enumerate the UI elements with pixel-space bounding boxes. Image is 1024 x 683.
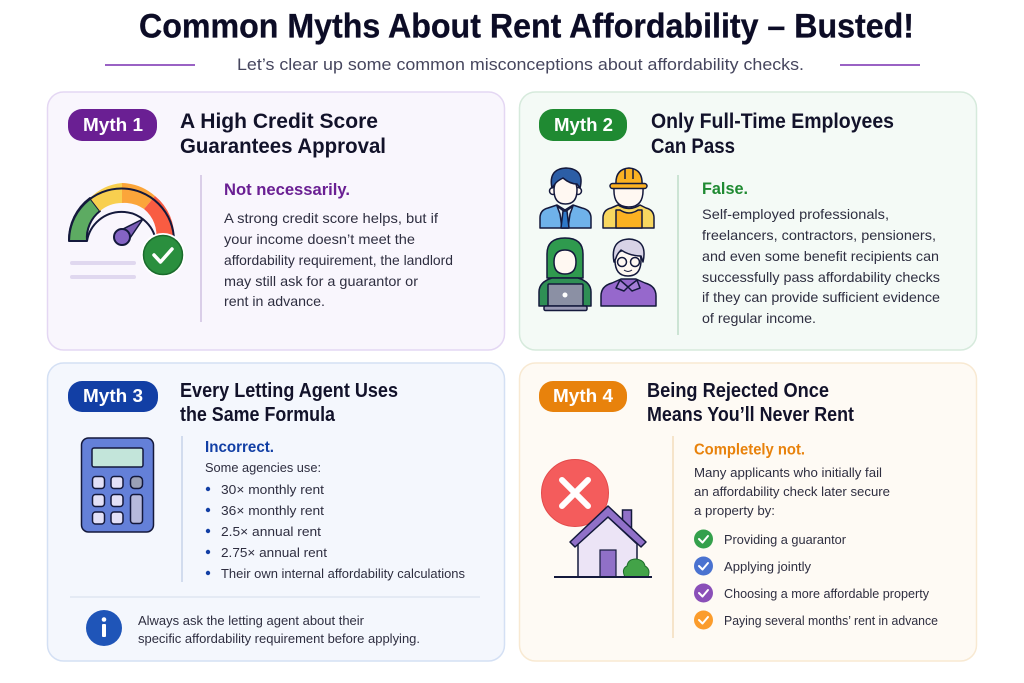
myth 1 body text: your income doesn’t meet the <box>224 231 415 247</box>
myth 4 heading <box>647 380 854 426</box>
myth 2 heading <box>651 109 894 158</box>
myth 4 body text: a property by: <box>694 503 775 518</box>
myth 1 heading <box>180 109 386 158</box>
subtitle: Let’s clear up some common misconceptions about affordability checks. <box>237 55 804 74</box>
worker: construction <box>603 168 654 228</box>
myth 3 heading <box>180 380 398 426</box>
myth 4 body text <box>694 465 890 518</box>
myth 2 body text: of regular income. <box>702 310 816 326</box>
worker: freelancer with laptop <box>539 238 591 310</box>
myth 4 body text: an affordability check later secure <box>694 484 890 499</box>
myth 1 badge: Myth 1 <box>83 115 143 135</box>
check: guarantor <box>694 530 846 548</box>
panel: myth 1 <box>48 92 504 350</box>
check: affordable property <box>694 584 930 602</box>
check: jointly <box>694 556 812 576</box>
myth 2 body text: if they can provide sufficient evidence <box>702 289 940 305</box>
myth 1 body text <box>224 210 453 309</box>
icon: credit score gauge <box>69 183 185 279</box>
myth 3 heading: the Same Formula <box>180 404 336 426</box>
worker: office employee <box>540 168 591 228</box>
myth 2 body text <box>702 206 940 326</box>
myth 4 verdict: Completely not. <box>694 442 805 458</box>
myth 3 badge: Myth 3 <box>83 386 143 406</box>
panel: myth 3 <box>48 363 504 661</box>
myth 3 verdict: Incorrect. <box>205 439 274 456</box>
myth 3 formula list <box>205 460 465 581</box>
myth 2 heading: Can Pass <box>651 134 735 158</box>
check: guarantor: Providing a guarantor <box>724 533 846 547</box>
myth 1 body text: may still ask for a guarantor or <box>224 273 418 289</box>
myth 1 body text: A strong credit score helps, but if <box>224 210 438 226</box>
myth 3 formula list: 2.75× annual rent <box>221 545 327 560</box>
myth 1 verdict: Not necessarily. <box>224 180 350 199</box>
myth 2 body text: Self-employed professionals, <box>702 206 889 222</box>
tip text: Always ask the letting agent about their <box>138 613 365 628</box>
check: rent in advance: Paying several months’ rent in advance <box>724 614 938 628</box>
worker: pensioner <box>601 239 656 306</box>
myth 2 badge: Myth 2 <box>554 115 613 135</box>
myth 4 badge <box>539 381 627 412</box>
myth 1 badge <box>68 109 157 141</box>
check: affordable property: Choosing a more affordable property <box>724 587 930 601</box>
tip text <box>138 613 420 646</box>
myth 2 badge <box>539 109 627 141</box>
icon: rejected house <box>542 460 652 577</box>
title: Common Myths About Rent Affordability – Busted! <box>139 8 914 46</box>
checklist <box>694 530 938 630</box>
myth 3 formula list: Their own internal affordability calculations <box>221 566 465 581</box>
myth 2 verdict: False. <box>702 179 748 198</box>
icon: calculator <box>82 438 154 532</box>
myth 3 formula list: 2.5× annual rent <box>221 524 321 539</box>
myth 1 heading: Guarantees Approval <box>180 134 386 158</box>
myth 2 heading: Only Full-Time Employees <box>651 109 894 133</box>
myth 4 badge: Myth 4 <box>553 386 613 406</box>
myth 3 badge <box>68 381 158 412</box>
icon: info <box>86 610 122 646</box>
myth 3 formula list: Some agencies use: <box>205 460 321 475</box>
myth 3 formula list: 30× monthly rent <box>221 482 324 497</box>
myth 2 body text: freelancers, contractors, pensioners, <box>702 227 936 243</box>
myth 1 heading: A High Credit Score <box>180 109 378 133</box>
panel: myth 2 <box>520 92 976 350</box>
myth 4 body text: Many applicants who initially fail <box>694 465 882 480</box>
tip text: specific affordability requirement before applying. <box>138 631 420 646</box>
panel: myth 4 <box>520 363 976 661</box>
myth 4 heading: Means You’ll Never Rent <box>647 404 854 426</box>
check: jointly: Applying jointly <box>724 560 812 574</box>
myth 2 body text: and even some benefit recipients can <box>702 248 939 264</box>
check: rent in advance <box>694 610 938 630</box>
myth 3 formula list: 36× monthly rent <box>221 503 324 518</box>
myth 3 heading: Every Letting Agent Uses <box>180 380 398 402</box>
myth 1 body text: rent in advance. <box>224 293 325 309</box>
myth 4 heading: Being Rejected Once <box>647 380 829 402</box>
myth 1 body text: affordability requirement, the landlord <box>224 252 453 268</box>
myth 2 body text: successfully pass affordability checks <box>702 269 940 285</box>
icon: four workers <box>539 168 656 310</box>
